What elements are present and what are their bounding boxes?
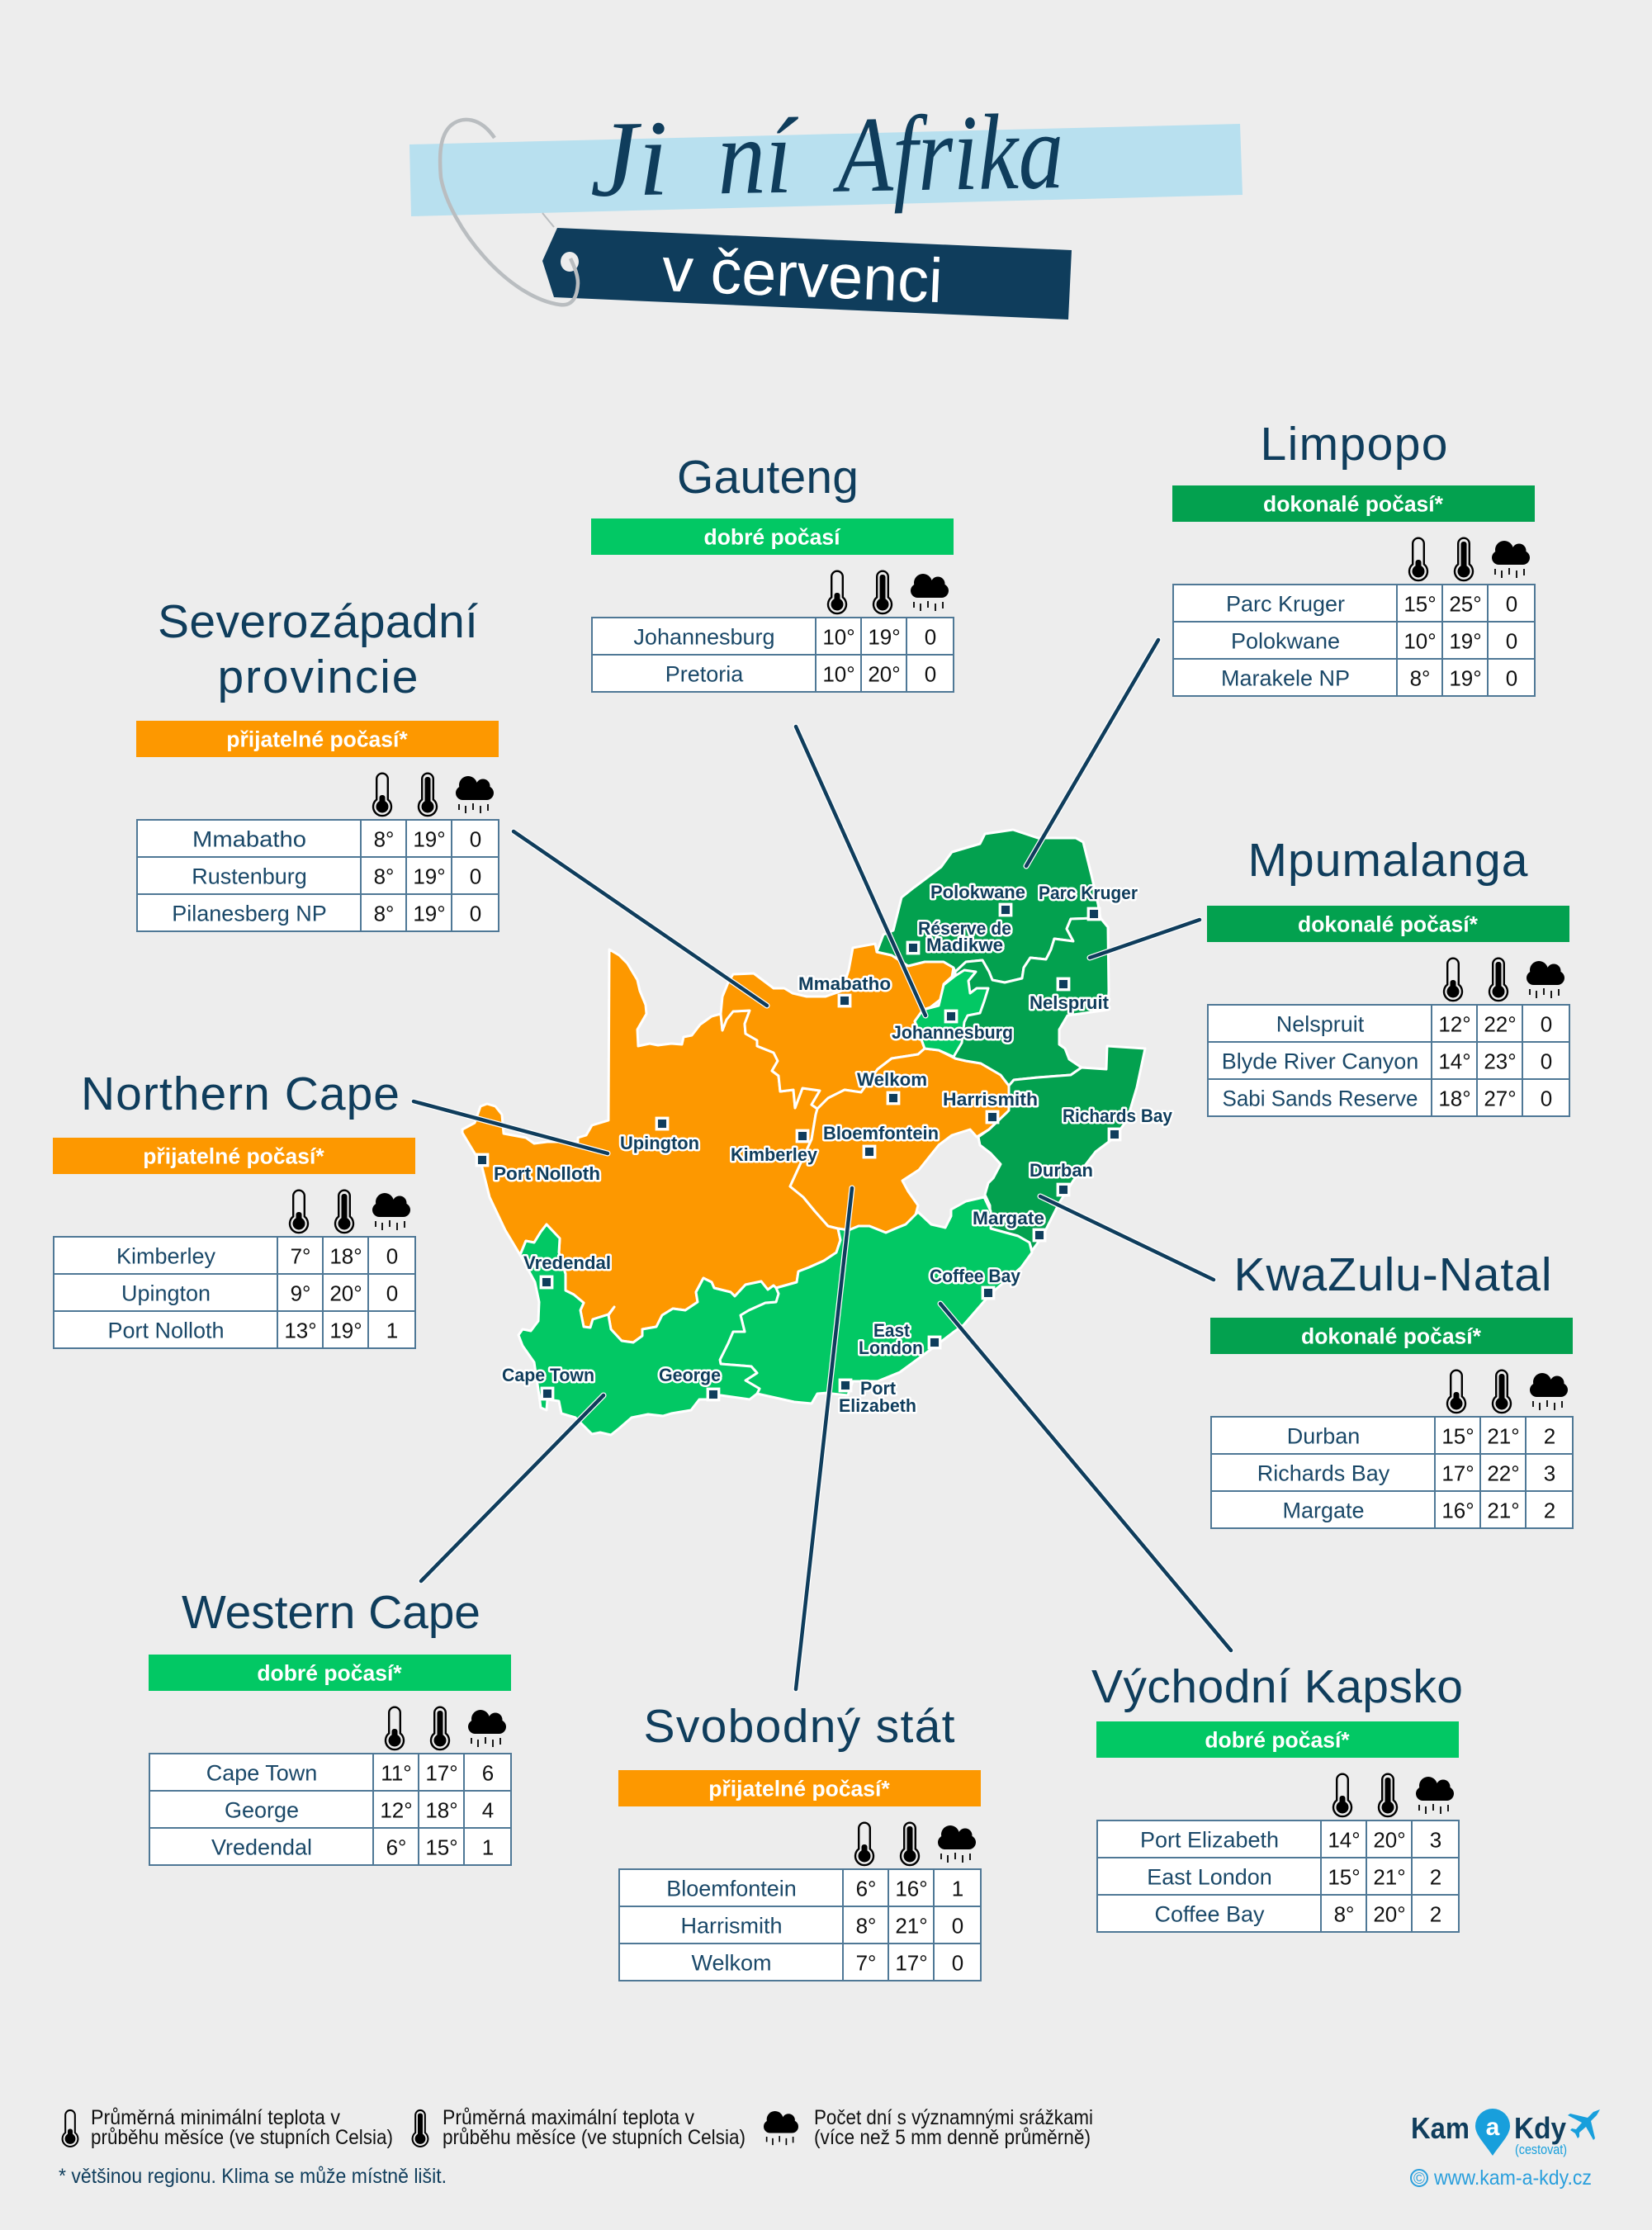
table: 21° [1373,1864,1406,1889]
table: 10° [1403,629,1437,654]
title: Jižní Afrika [589,92,1064,220]
table: 0 [386,1243,398,1268]
icons [1447,1371,1568,1413]
table: 8° [1410,665,1430,690]
table: 19° [1449,665,1482,690]
city labels: Welkom [857,1069,927,1090]
table: 8° [1334,1902,1354,1927]
rating bar [618,1770,981,1806]
region: Western Cape [518,1224,779,1435]
table: 27° [1484,1087,1517,1111]
footnote: * většinou regionu. Klima se může místně lišit. [59,2165,447,2188]
table: 19° [413,902,446,926]
icons [855,1823,976,1865]
icons [1333,1774,1454,1816]
table: Cape Town [206,1760,317,1785]
table [1211,1417,1573,1528]
table: 0 [1506,665,1517,690]
legend: maximum temperature: Průměrná maximální teplota v [443,2106,694,2129]
table: Rustenburg [192,864,307,888]
table: 21° [895,1914,928,1939]
table: 15° [1328,1864,1361,1889]
table: 0 [1506,629,1517,654]
heading: Severozápadní [158,595,478,648]
city labels: Réserve de [918,918,1011,939]
table: Pilanesberg NP [172,902,327,926]
table: 17° [1441,1461,1474,1486]
table: 0 [470,864,481,888]
city labels: Vredendal [523,1252,611,1273]
table: 19° [329,1318,362,1342]
heading: Mpumalanga [1248,834,1528,887]
heading: provincie [218,651,418,703]
table: Vredendal [211,1835,312,1859]
city labels: Harrismith [943,1089,1038,1110]
table: Pretoria [665,662,744,687]
region: Northern Cape [462,949,840,1342]
table: Margate [1282,1498,1365,1522]
legend: minimum temperature: Průměrná minimální teplota v [91,2106,340,2129]
table: 17° [425,1760,458,1785]
table: 7° [856,1950,876,1975]
region: Limpopo [877,830,1101,982]
table [149,1754,511,1865]
table: 19° [413,864,446,888]
region: Mpumalanga [939,918,1109,1086]
panel: Limpopo [1172,418,1535,696]
rating bar [53,1138,415,1174]
table: 0 [1506,591,1517,616]
table: 8° [856,1914,876,1939]
table: Mmabatho [192,827,306,852]
title: Jižní Afrika: Afrika [831,92,1064,215]
rating bar [1096,1721,1459,1758]
city labels: Nelspruit [1030,992,1110,1013]
city labels: Mmabatho [798,973,891,994]
table: 10° [822,624,855,649]
table: 10° [822,662,855,687]
heading [158,595,478,703]
city labels: Durban [1030,1160,1093,1181]
rating bar [149,1655,511,1691]
table: 13° [284,1318,317,1342]
table: 6° [386,1835,406,1859]
table: East London [1147,1864,1272,1889]
table: George [225,1798,299,1823]
table: Coffee Bay [1154,1902,1265,1927]
table: 2 [1544,1423,1555,1448]
table [137,820,499,931]
icons [373,774,494,816]
city labels: Richards Bay [1063,1106,1173,1126]
table: 8° [374,864,394,888]
legend: rain days: (více než 5 mm denně průměrně) [814,2126,1091,2149]
table: 0 [1541,1087,1552,1111]
city labels: Elizabeth [839,1395,916,1416]
rating bar: dobré počasí* [1205,1727,1350,1752]
table: 15° [425,1835,458,1859]
table: 15° [1441,1423,1474,1448]
table: 4 [482,1798,494,1823]
tag: v červenci: v červenci [660,234,944,316]
table [592,618,954,692]
logo: Kam a Kdy: (cestovat) [1515,2142,1567,2157]
table: 7° [291,1243,310,1268]
table: 20° [1373,1902,1406,1927]
table: 20° [329,1281,362,1306]
city labels: Port [860,1378,897,1399]
table: Kimberley [116,1243,216,1268]
rating bar: přijatelné počasí* [708,1777,890,1802]
rating bar [1207,906,1569,942]
table: Nelspruit [1276,1012,1365,1037]
city labels: Bloemfontein [823,1123,939,1143]
city labels: Polokwane [930,882,1025,902]
table: Durban [1287,1423,1360,1448]
table: 0 [925,624,936,649]
icons [386,1707,506,1749]
heading: KwaZulu-Natal [1233,1248,1552,1301]
icons [1409,538,1530,580]
table: 0 [925,662,936,687]
panel: Western Cape [149,1586,511,1865]
city labels: Margate [973,1208,1044,1229]
rating bar: dobré počasí [704,525,841,550]
table: 0 [386,1281,398,1306]
legend: maximum temperature: průběhu měsíce (ve stupních Celsia) [443,2126,746,2149]
table [1097,1820,1459,1932]
table [619,1869,981,1981]
table: 3 [1430,1828,1441,1853]
city labels: Parc Kruger [1039,883,1138,903]
table [54,1237,415,1348]
table: 6 [482,1760,494,1785]
city labels: Port Nolloth [494,1163,600,1184]
table: 12° [380,1798,413,1823]
legend [63,2106,1093,2149]
table: Harrismith [680,1914,783,1939]
city labels: Madikwe [926,935,1003,955]
heading: Východní Kapsko [1091,1660,1463,1713]
table: 8° [374,827,394,852]
rating bar [136,721,499,757]
leader lines [414,640,1231,1689]
city labels: East [873,1320,911,1341]
table: 11° [381,1760,412,1785]
table: 18° [1438,1087,1471,1111]
region: Free State [790,1049,1009,1233]
title banner [409,92,1243,220]
table: 1 [386,1318,398,1342]
table: 21° [1487,1498,1520,1522]
table: Parc Kruger [1226,591,1345,616]
rating bar [1210,1318,1573,1354]
panel: Svobodný stát [618,1700,981,1981]
legend: maximum temperature [413,2106,746,2149]
table: Richards Bay [1257,1461,1390,1486]
table [1208,1005,1569,1116]
table: Sabi Sands Reserve [1222,1087,1418,1111]
table: 12° [1438,1012,1471,1037]
rating bar [591,518,954,555]
table: Johannesburg [633,624,775,649]
rating bar: dobré počasí* [257,1661,402,1686]
logo: Kam a Kdy [1411,2109,1600,2157]
legend: rain days [764,2106,1093,2149]
city labels: London [859,1338,923,1358]
table: 15° [1403,591,1437,616]
tag: v červenci [440,120,1072,320]
table: 0 [1541,1012,1552,1037]
title: Jižní Afrika: ní [717,96,800,217]
table: 18° [425,1798,458,1823]
panel: Northern Cape [53,1068,415,1348]
table: 17° [895,1950,928,1975]
table: 6° [856,1876,876,1901]
map of South Africa [462,830,1145,1435]
region: Eastern Cape [720,1197,1032,1404]
table: Port Elizabeth [1140,1828,1279,1853]
table: Marakele NP [1221,665,1350,690]
city markers [476,904,1120,1400]
title: Jižní Afrika: Ji [589,98,670,220]
table: 19° [868,624,901,649]
icons [828,571,949,613]
table: 22° [1484,1012,1517,1037]
table: Blyde River Canyon [1222,1049,1418,1073]
heading: Gauteng [677,451,859,504]
legend: minimum temperature: průběhu měsíce (ve stupních Celsia) [91,2126,393,2149]
city labels: Cape Town [502,1365,594,1385]
table: 16° [1441,1498,1474,1522]
city labels: Coffee Bay [930,1266,1021,1286]
legend: rain days: Počet dní s významnými srážkami [814,2106,1093,2129]
logo: Kam a Kdy: a [1486,2114,1500,2141]
table: 3 [1544,1461,1555,1486]
rating bar: dokonalé počasí* [1298,911,1479,936]
table: 2 [1430,1864,1441,1889]
table: 2 [1544,1498,1555,1522]
table: 9° [291,1281,310,1306]
heading: Western Cape [182,1586,480,1639]
table: 2 [1430,1902,1441,1927]
table: 16° [895,1876,928,1901]
panel: KwaZulu-Natal [1210,1248,1573,1528]
website: www.kam-a-kdy.cz [1433,2166,1592,2190]
table: 22° [1487,1461,1520,1486]
heading: Svobodný stát [644,1700,955,1753]
table [1173,585,1535,696]
table: Polokwane [1231,629,1340,654]
region: KwaZulu-Natal [978,1046,1145,1251]
table: 23° [1484,1049,1517,1073]
table: Port Nolloth [107,1318,225,1342]
table: 19° [1449,629,1482,654]
rating bar: přijatelné počasí* [226,727,408,751]
panel: Mpumalanga [1207,834,1569,1116]
table: 25° [1449,591,1482,616]
panel: Východní Kapsko [1091,1660,1463,1932]
panel: Gauteng [591,451,954,692]
region: North West [721,944,954,1109]
table: 0 [952,1950,963,1975]
rating bar: dokonalé počasí* [1263,492,1444,517]
table: Bloemfontein [666,1876,797,1901]
table: 20° [868,662,901,687]
table: 0 [952,1914,963,1939]
logo: Kam a Kdy: Kdy [1514,2111,1566,2145]
website: © [1413,2171,1425,2188]
city labels: George [659,1365,721,1385]
table: Upington [121,1281,211,1306]
table: 20° [1373,1828,1406,1853]
table: 21° [1487,1423,1520,1448]
table: 18° [329,1243,362,1268]
region: Gauteng [915,970,988,1057]
table: 14° [1438,1049,1471,1073]
icons [1444,959,1564,1001]
table: 1 [952,1876,963,1901]
rating bar [1172,485,1535,522]
table: 0 [1541,1049,1552,1073]
city labels: Kimberley [731,1144,818,1165]
rating bar: přijatelné počasí* [143,1144,324,1169]
table: 19° [413,827,446,852]
heading: Limpopo [1260,418,1448,471]
rating bar: dokonalé počasí* [1301,1324,1482,1349]
table: 1 [482,1835,494,1859]
icons [290,1191,410,1233]
city labels: Upington [620,1133,699,1153]
table: 0 [470,827,481,852]
table: 0 [470,902,481,926]
table: Welkom [691,1950,772,1975]
logo: Kam a Kdy: Kam [1411,2111,1470,2145]
city labels [494,882,1173,1416]
city labels: Johannesburg [892,1022,1013,1043]
heading: Northern Cape [81,1068,400,1120]
legend: minimum temperature [63,2106,393,2149]
table: 8° [374,902,394,926]
panel: Severozápadní provincie [136,595,499,931]
table: 14° [1328,1828,1361,1853]
